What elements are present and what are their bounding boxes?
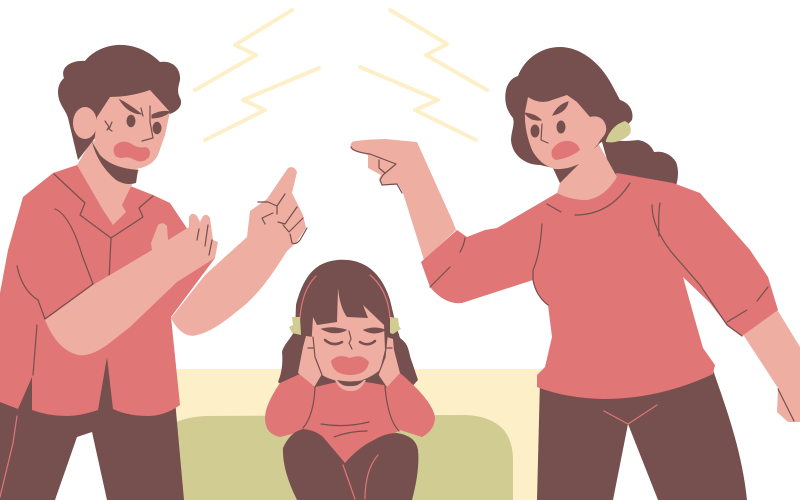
girl hair xyxy=(278,260,418,400)
father face xyxy=(94,90,170,169)
father finger lines xyxy=(197,194,307,255)
mother trousers xyxy=(537,370,747,500)
father xyxy=(0,45,307,500)
mother wrist line xyxy=(778,389,794,421)
lightning bolts xyxy=(195,10,487,140)
mother pointing arm xyxy=(350,139,456,260)
mother face xyxy=(525,95,606,169)
mother neck xyxy=(557,143,617,200)
girl sweater xyxy=(265,373,435,463)
father hair xyxy=(58,45,181,160)
mother sweater lines xyxy=(430,183,768,336)
father trousers xyxy=(0,340,184,500)
mother finger lines xyxy=(351,147,402,193)
girl trousers xyxy=(283,429,418,500)
father raised hand and arm xyxy=(45,214,218,355)
mother ponytail xyxy=(600,135,678,195)
father pointing arm and hand xyxy=(171,167,306,336)
father shirt xyxy=(0,165,215,416)
girl neck xyxy=(335,380,366,391)
father eyes and brows xyxy=(105,100,170,141)
girl xyxy=(265,260,435,500)
father shirt seams xyxy=(0,174,153,497)
background sofa xyxy=(170,369,542,500)
mother forearm xyxy=(734,300,800,422)
girl mouth xyxy=(331,356,369,375)
girl chin shadow xyxy=(337,380,364,386)
girl facial features xyxy=(322,328,385,349)
mother facial features xyxy=(525,102,568,143)
mother mouth xyxy=(552,141,580,160)
girl hands xyxy=(298,336,400,387)
father neck xyxy=(77,140,139,225)
girl knee lines xyxy=(343,455,378,499)
father beard xyxy=(92,142,138,184)
girl headband xyxy=(300,275,390,318)
mother hair tie xyxy=(606,121,631,142)
mother trouser lines xyxy=(604,405,657,424)
mother sweater xyxy=(421,173,778,399)
girl hair ties xyxy=(289,317,401,335)
mother hair xyxy=(505,47,632,183)
girl sweater lines xyxy=(303,387,399,437)
mother chin hair xyxy=(553,143,600,183)
father ear xyxy=(73,107,97,139)
father mouth xyxy=(114,142,150,161)
girl face xyxy=(311,288,385,382)
mother xyxy=(350,47,800,500)
